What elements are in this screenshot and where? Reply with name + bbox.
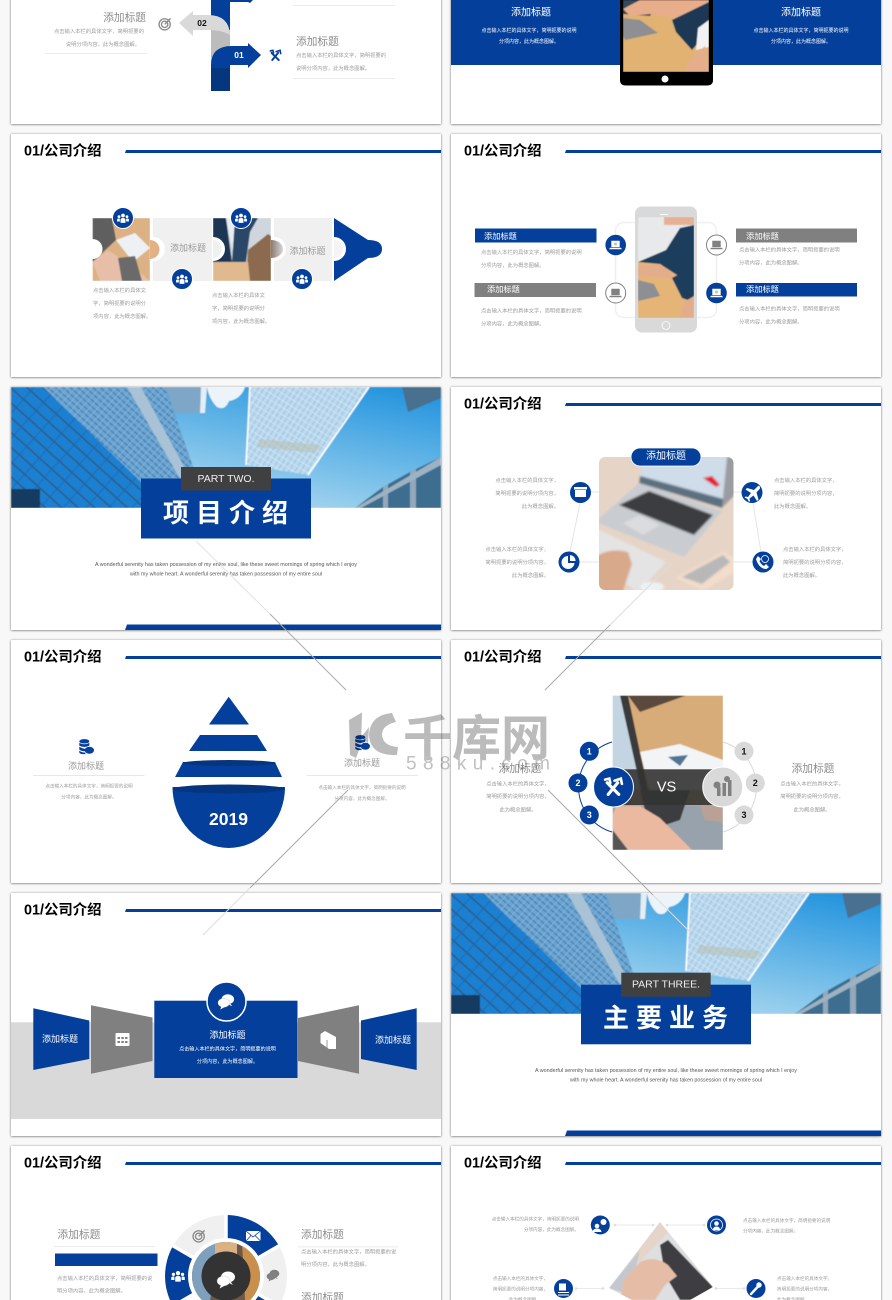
text block: right item xyxy=(293,5,395,79)
caption 2 xyxy=(212,291,270,325)
text block: left item: 添加标题 xyxy=(103,11,146,24)
bottom bar xyxy=(565,1130,881,1136)
photo: laptop on desk xyxy=(599,457,734,590)
section title block xyxy=(141,478,311,538)
blue numbered dots: 2 xyxy=(575,778,581,788)
right item 1: 点击输入本栏的具体文字，简明扼要的说 xyxy=(301,1248,397,1256)
caption 2: 字，简明扼要的说明分 xyxy=(212,304,266,312)
text: bottom right: 点击输入本栏的具体文字， xyxy=(777,1275,832,1282)
text: left top: 点击输入本栏的具体文字， xyxy=(495,476,559,484)
text: bottom left: 简明扼要的说明分项内容， xyxy=(493,1286,548,1292)
phone screen photo xyxy=(638,217,694,318)
panel: part two section slide xyxy=(11,387,441,630)
card: calendar xyxy=(91,1005,152,1074)
english text: with my whole heart. A wonderful serenity has taken possession of my entire soul xyxy=(130,572,322,578)
left item 1 xyxy=(475,228,596,269)
right item 1: 点击输入本栏的具体文字，简明扼要的说明 xyxy=(739,246,840,254)
text: top left: 分项内容，此为概念图解。 xyxy=(524,1226,579,1233)
icon: tools xyxy=(270,50,281,60)
left item 1: 分项内容，此为概念图解。 xyxy=(481,261,545,269)
left item 1: 添加标题 xyxy=(484,231,517,241)
blue band xyxy=(451,0,881,65)
left item 2 xyxy=(474,283,596,328)
caption 1: 项内容，此为概念图解。 xyxy=(93,312,151,320)
icon: chat gray xyxy=(267,1270,279,1282)
left item xyxy=(54,1228,158,1294)
panel: timeline arrows slide (cropped) xyxy=(11,0,441,124)
arrow stub at top xyxy=(211,0,253,3)
puzzle piece text 2 xyxy=(271,218,332,281)
right text: 简明扼要的说明分项内容， xyxy=(780,792,844,800)
icon: pie badge xyxy=(558,552,580,572)
text: left bottom: 点击输入本栏的具体文字， xyxy=(485,545,549,553)
gray numbered dots: 1 xyxy=(741,746,747,756)
header xyxy=(464,396,881,412)
text: right top: 点击输入本栏的具体文字， xyxy=(774,476,838,484)
left text: 简明扼要的说明分项内容， xyxy=(486,792,550,800)
photo: desk xyxy=(613,696,723,850)
arrow 02 xyxy=(179,11,230,36)
left item: 点击输入本栏的具体文字，简明扼要的说 xyxy=(57,1274,153,1282)
icon: person ring badge xyxy=(707,1216,726,1234)
vertical ribbon xyxy=(211,0,230,91)
card: far right: 添加标题 xyxy=(375,1034,411,1045)
pill heading: 添加标题 xyxy=(646,449,686,462)
text: bottom right xyxy=(777,1275,832,1300)
drop chart xyxy=(172,697,285,848)
right text xyxy=(780,762,844,814)
photo: skyscrapers xyxy=(11,387,441,508)
left item xyxy=(33,739,144,800)
connector lines xyxy=(575,1224,745,1290)
text: top left: 点击输入本栏的具体文字，简明扼要的说明 xyxy=(492,1216,579,1222)
left item: 添加标题 xyxy=(68,760,104,771)
text block: left item: 说明分项内容，此为概念图解。 xyxy=(66,40,140,48)
gray numbered dots: 2 xyxy=(753,778,758,788)
gray numbered dots: 3 xyxy=(741,810,747,820)
puzzle piece photo 1 xyxy=(92,218,150,281)
drop chart: 2019 xyxy=(209,809,248,829)
panel: perspective cards slide xyxy=(11,893,441,1136)
text: bottom right: 简明扼要的说明分项内容， xyxy=(777,1286,832,1292)
pill heading xyxy=(631,448,701,466)
icon: phone badge xyxy=(752,552,774,572)
tablet screen photo xyxy=(623,0,709,72)
arcs xyxy=(579,742,756,832)
right item xyxy=(307,735,418,802)
header xyxy=(24,902,441,918)
caption 1 xyxy=(93,286,151,320)
panel: radial wheel slide (cropped) xyxy=(11,1146,441,1300)
photo: skyscrapers xyxy=(451,893,881,1014)
icon: target xyxy=(159,18,171,30)
left item 1: 点击输入本栏的具体文字，简明扼要的说明 xyxy=(481,248,582,256)
card: center xyxy=(154,1001,298,1078)
caption 1: 点击输入本栏的具体文 xyxy=(93,286,147,294)
panel: VS comparison slide xyxy=(451,640,881,883)
header: 01/公司介绍 xyxy=(24,902,102,918)
header xyxy=(24,648,441,666)
connector lines xyxy=(569,492,763,562)
part label: PART TWO. xyxy=(198,473,254,485)
icon: chat circle xyxy=(207,982,246,1021)
watermark: diagonal lines xyxy=(196,541,690,935)
photo circle xyxy=(192,1242,260,1300)
caption 2: 项内容，此为概念图解。 xyxy=(212,317,270,325)
icon badges xyxy=(112,208,312,290)
text block: left item xyxy=(45,11,147,54)
panel: tablet slide (cropped) xyxy=(451,0,881,124)
watermark logo mark xyxy=(349,712,398,758)
icon: wrench badge xyxy=(746,1279,766,1298)
icon: target xyxy=(193,1230,205,1242)
text: left bottom xyxy=(485,545,549,579)
card: center: 点击输入本栏的具体文字，简明扼要的说明 xyxy=(179,1046,276,1052)
caption 2: 点击输入本栏的具体文 xyxy=(212,291,266,299)
right item 1 xyxy=(298,1228,398,1268)
header: 01/公司介绍 xyxy=(464,648,542,666)
panel: laptop diamond slide (cropped) xyxy=(451,1146,881,1300)
panel: phone slide xyxy=(451,134,881,377)
puzzle arrow head xyxy=(334,218,382,281)
right item: 分项内容，此为概念图解。 xyxy=(334,795,390,802)
right item 1: 明分项内容，此为概念图解。 xyxy=(301,1260,370,1268)
text: top right: 分项内容，此为概念图解。 xyxy=(743,1228,798,1234)
text: right bottom: 点击输入本栏的具体文字， xyxy=(783,545,847,553)
right text: 添加标题 xyxy=(792,762,835,775)
part label: PART THREE. xyxy=(632,978,700,990)
icon badges xyxy=(605,235,727,303)
text block: right: 添加标题 xyxy=(781,6,821,18)
right text: 点击输入本栏的具体文字， xyxy=(780,780,844,788)
right item 2 xyxy=(736,283,857,326)
gray band xyxy=(11,1022,441,1119)
left item: 添加标题 xyxy=(58,1228,101,1241)
puzzle piece text 1 xyxy=(150,218,212,281)
right item 1 xyxy=(736,228,857,266)
icon: person alert badge xyxy=(591,1216,610,1234)
caption 1: 字，简明扼要的说明分 xyxy=(93,299,147,307)
english text xyxy=(95,562,357,578)
text block: right item: 点击输入本栏的具体文字，简明扼要的 xyxy=(296,51,386,59)
text block: right xyxy=(753,6,849,45)
header xyxy=(24,142,441,160)
card: books xyxy=(298,1005,359,1074)
left text xyxy=(486,762,550,814)
watermark: logo and site name xyxy=(349,700,550,774)
left item: 明分项内容，此为概念图解。 xyxy=(57,1286,126,1294)
icon: server badge xyxy=(554,1279,573,1298)
left text: 此为概念图解。 xyxy=(499,806,537,814)
right item 1: 添加标题 xyxy=(301,1228,344,1241)
text: left top xyxy=(495,476,559,510)
text: right bottom: 此为概念图解。 xyxy=(783,571,820,579)
puzzle piece photo 2 xyxy=(213,218,271,281)
right item 2: 添加标题 xyxy=(746,284,779,294)
puzzle piece text 1: 添加标题 xyxy=(170,242,206,253)
arrow 01: 01 xyxy=(234,50,244,60)
right text: 此为概念图解。 xyxy=(793,806,831,814)
card: far left xyxy=(33,1008,89,1070)
text block: left: 添加标题 xyxy=(511,6,551,18)
right item 1: 分项内容，此为概念图解。 xyxy=(739,258,803,266)
blue numbered dots: 1 xyxy=(587,746,592,756)
english text: A wonderful serenity has taken possession of my entire soul, like these sweet mornings of spring which I enjoy xyxy=(535,1068,797,1074)
panel: part three section slide xyxy=(451,893,881,1136)
text: bottom left: 点击输入本栏的具体文字， xyxy=(493,1275,548,1282)
text: right bottom: 简明扼要的说明分项内容， xyxy=(783,558,847,566)
section title block xyxy=(581,985,751,1044)
icon: center chat xyxy=(202,1252,250,1300)
tablet device xyxy=(620,0,713,86)
text block: right: 点击输入本栏的具体文字，简明扼要的说明 xyxy=(753,27,849,34)
text block: right item: 说明分项内容，此为概念图解。 xyxy=(296,64,370,72)
part label xyxy=(181,467,271,490)
english text: A wonderful serenity has taken possession of my entire soul, like these sweet mornings of spring which I enjoy xyxy=(95,562,357,568)
text: top left xyxy=(492,1216,579,1233)
left item 2: 点击输入本栏的具体文字，简明扼要的说明 xyxy=(481,306,582,314)
header xyxy=(464,1154,881,1172)
left text: 添加标题 xyxy=(499,762,542,775)
big circle blue xyxy=(594,767,634,807)
header xyxy=(464,142,881,160)
text block: left xyxy=(481,6,577,45)
section title block: 项目介绍 xyxy=(163,498,295,528)
text: bottom left xyxy=(493,1275,548,1300)
left text: 点击输入本栏的具体文字， xyxy=(486,780,550,788)
header: 01/公司介绍 xyxy=(24,1154,102,1172)
watermark url: 588ku.com xyxy=(406,754,550,774)
text block: left: 分项内容，此为概念图解。 xyxy=(499,38,559,45)
left item: 分项内容，此为概念图解。 xyxy=(61,794,117,800)
arrow 02: 02 xyxy=(197,18,207,28)
big circle gray xyxy=(703,767,743,807)
left item 2: 分项内容，此为概念图解。 xyxy=(481,320,545,328)
blue numbered dots: 3 xyxy=(587,810,592,820)
watermark name: 千库网 xyxy=(403,700,550,770)
text: right top: 简明扼要的说明分项内容， xyxy=(774,489,838,497)
header xyxy=(464,648,881,666)
gray numbered dots xyxy=(734,742,765,824)
text block: left item: 点击输入本栏的具体文字，简明扼要的 xyxy=(54,27,144,35)
right item 2: 分项内容，此为概念图解。 xyxy=(739,318,803,326)
icon: plane badge xyxy=(742,482,762,503)
dark band with VS xyxy=(613,769,723,805)
left item: 点击输入本栏的具体文字，简明扼要的说明 xyxy=(45,782,133,790)
text block: left: 点击输入本栏的具体文字，简明扼要的说明 xyxy=(481,27,577,34)
text block: right: 分项内容，此为概念图解。 xyxy=(771,38,831,45)
wheel segments xyxy=(163,1205,289,1300)
left item 2: 添加标题 xyxy=(487,284,520,294)
photo: diamond laptop xyxy=(605,1220,717,1300)
card: center: 分项内容，此为概念图解。 xyxy=(197,1058,258,1065)
icon: mail xyxy=(246,1231,260,1241)
section title block: 主要业务 xyxy=(603,1003,735,1033)
text: left bottom: 此为概念图解。 xyxy=(512,571,549,579)
panel: laptop four points slide xyxy=(451,387,881,630)
card: far left: 添加标题 xyxy=(42,1033,78,1044)
icon: people xyxy=(171,1271,185,1282)
phone device xyxy=(635,206,697,332)
right item 1: 添加标题 xyxy=(746,231,779,241)
right item: 点击输入本栏的具体文字，简明扼要的说明 xyxy=(318,784,406,791)
text block: right item: 添加标题 xyxy=(296,35,339,48)
english text: with my whole heart. A wonderful serenity has taken possession of my entire soul xyxy=(570,1078,762,1084)
header: 01/公司介绍 xyxy=(464,1154,542,1172)
header xyxy=(24,1154,441,1172)
icon: gift badge xyxy=(570,482,591,503)
bottom bar xyxy=(125,624,441,630)
text: left bottom: 简明扼要的说明分项内容， xyxy=(485,558,549,566)
blue numbered dots xyxy=(568,742,599,824)
text: right top: 此为概念图解。 xyxy=(774,502,811,510)
dark band with VS: VS xyxy=(657,780,676,796)
header: 01/公司介绍 xyxy=(464,142,542,160)
text: left top: 此为概念图解。 xyxy=(522,502,559,510)
panel: puzzle process slide xyxy=(11,134,441,377)
text: right bottom xyxy=(783,545,847,579)
header: 01/公司介绍 xyxy=(24,142,102,160)
text: left top: 简明扼要的说明分项内容， xyxy=(495,489,559,497)
text: top right xyxy=(743,1217,831,1234)
part label xyxy=(621,973,711,997)
panel: water drop 2019 slide xyxy=(11,640,441,883)
header: 01/公司介绍 xyxy=(464,396,542,412)
outline frame xyxy=(616,222,716,318)
puzzle piece text 2: 添加标题 xyxy=(289,245,326,256)
arrow 01 xyxy=(211,43,261,68)
card: center: 添加标题 xyxy=(209,1029,246,1040)
english text xyxy=(535,1068,797,1084)
header: 01/公司介绍 xyxy=(24,648,102,666)
right item 2: 点击输入本栏的具体文字，简明扼要的说明 xyxy=(739,304,840,312)
right item: 添加标题 xyxy=(344,757,380,768)
text: top right: 点击输入本栏的具体文字，简明扼要的说明 xyxy=(743,1217,831,1224)
text: right top xyxy=(774,476,838,510)
card: far right xyxy=(361,1008,417,1070)
